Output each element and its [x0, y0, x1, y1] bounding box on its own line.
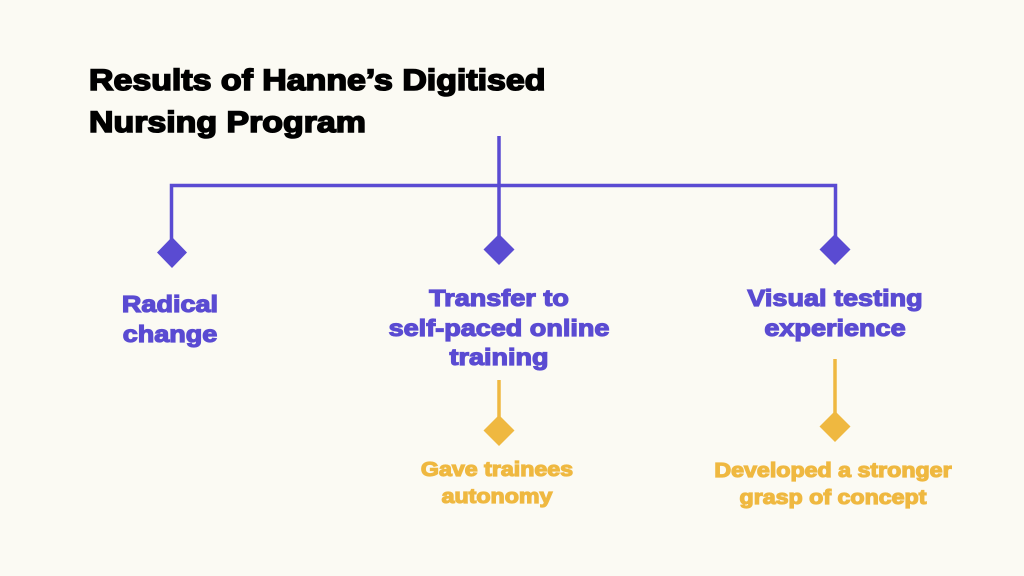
icon: purple diamond left — [157, 237, 187, 268]
label: visual testing experience: experience — [764, 314, 906, 340]
label: developed a stronger grasp of concept — [714, 460, 952, 509]
label: radical change: Radical — [122, 291, 218, 317]
yellow connector right — [833, 359, 837, 420]
icon: yellow diamond right — [820, 411, 850, 442]
label: visual testing experience: Visual testing — [747, 285, 923, 311]
label: gave trainees autonomy — [421, 459, 573, 508]
label: radical change: change — [123, 320, 217, 346]
icon: purple diamond right — [820, 234, 850, 265]
label: gave trainees autonomy: autonomy — [442, 486, 552, 508]
label: developed a stronger grasp of concept: Developed a stronger — [714, 460, 952, 482]
label: transfer to self-paced online training: self-paced online — [389, 314, 609, 340]
label: visual testing experience — [746, 285, 923, 342]
title — [89, 64, 545, 139]
purple branching connector — [172, 136, 836, 245]
icon: yellow diamond centre — [484, 415, 514, 446]
icon: purple diamond centre — [484, 234, 514, 265]
label: gave trainees autonomy: Gave trainees — [421, 459, 573, 481]
label: radical change — [122, 291, 218, 348]
label: transfer to self-paced online training: Transfer to — [429, 285, 569, 311]
yellow connector centre — [497, 380, 501, 425]
label: transfer to self-paced online training: training — [449, 344, 549, 370]
label: transfer to self-paced online training — [388, 285, 610, 371]
title: Nursing Program — [89, 106, 366, 139]
title: Results of Hanne’s Digitised — [89, 64, 545, 97]
label: developed a stronger grasp of concept: grasp of concept — [740, 487, 926, 509]
